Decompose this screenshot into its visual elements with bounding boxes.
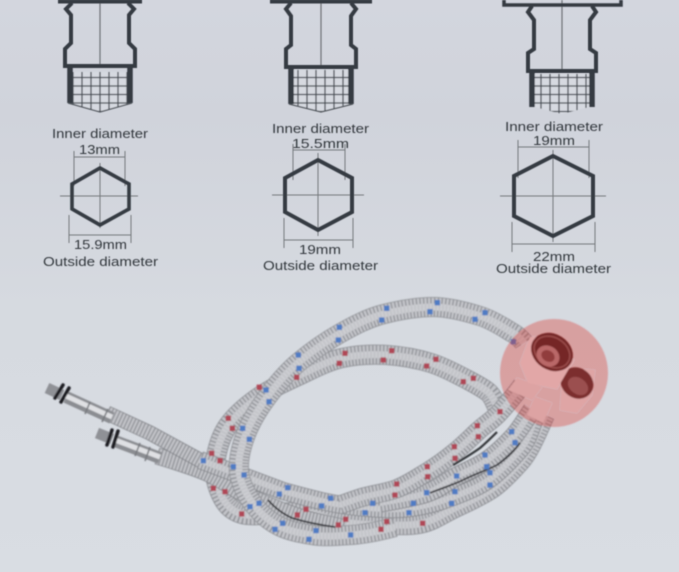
label: outside diameter: Outside diameter bbox=[496, 261, 612, 276]
hexagon bbox=[72, 168, 129, 225]
red markers bbox=[212, 351, 500, 529]
dimension lines bbox=[272, 144, 364, 248]
dimension lines bbox=[60, 151, 138, 243]
shiny highlight line bbox=[453, 432, 497, 465]
diagram: 19mm fitting bbox=[496, 0, 621, 276]
metal end one bbox=[47, 385, 112, 422]
diagram: 13mm fitting bbox=[43, 0, 159, 269]
photo: braided hoses bbox=[47, 303, 608, 539]
label: 15.9mm: 15.9mm bbox=[74, 237, 127, 252]
blue markers bbox=[203, 303, 515, 539]
hexagon bbox=[514, 156, 593, 236]
hose: middle strand bbox=[380, 410, 532, 503]
label: inner diameter: Inner diameter bbox=[505, 119, 604, 134]
diagram: 15.5mm fitting bbox=[263, 0, 379, 273]
connectors bbox=[508, 325, 600, 423]
fitting outline bbox=[504, 0, 621, 114]
hose: outer loop bbox=[239, 307, 524, 536]
connector: rear nut bbox=[554, 361, 600, 413]
label: inner diameter: Inner diameter bbox=[52, 126, 149, 141]
connector: front nut bbox=[520, 325, 580, 389]
shadow lines between strands bbox=[268, 443, 520, 527]
hose: end one strand bbox=[200, 412, 537, 509]
hose colour markers bbox=[203, 303, 515, 539]
label: 22mm: 22mm bbox=[533, 249, 575, 264]
metal end two bbox=[97, 430, 160, 461]
dimension lines bbox=[500, 140, 606, 252]
red highlight circle bbox=[500, 319, 608, 427]
fitting outline bbox=[270, 0, 372, 112]
label: inner diameter: Inner diameter bbox=[272, 121, 370, 136]
label: outside diameter: Outside diameter bbox=[263, 258, 379, 273]
hexagon bbox=[285, 160, 352, 230]
hose: inner loop bbox=[215, 355, 545, 525]
label: 19mm: 19mm bbox=[299, 242, 341, 257]
connector: stem two bbox=[527, 397, 552, 423]
hose: end one narrow section bbox=[107, 413, 205, 463]
label: 13mm: 13mm bbox=[79, 142, 120, 157]
hose: end two strand bbox=[157, 456, 345, 528]
label: 15.5mm: 15.5mm bbox=[292, 136, 349, 151]
label: 19mm: 19mm bbox=[533, 133, 575, 148]
hose: upper strand bbox=[340, 385, 522, 505]
connector: stem one bbox=[508, 378, 542, 400]
fitting outline bbox=[58, 0, 142, 112]
label: outside diameter: Outside diameter bbox=[43, 254, 159, 269]
